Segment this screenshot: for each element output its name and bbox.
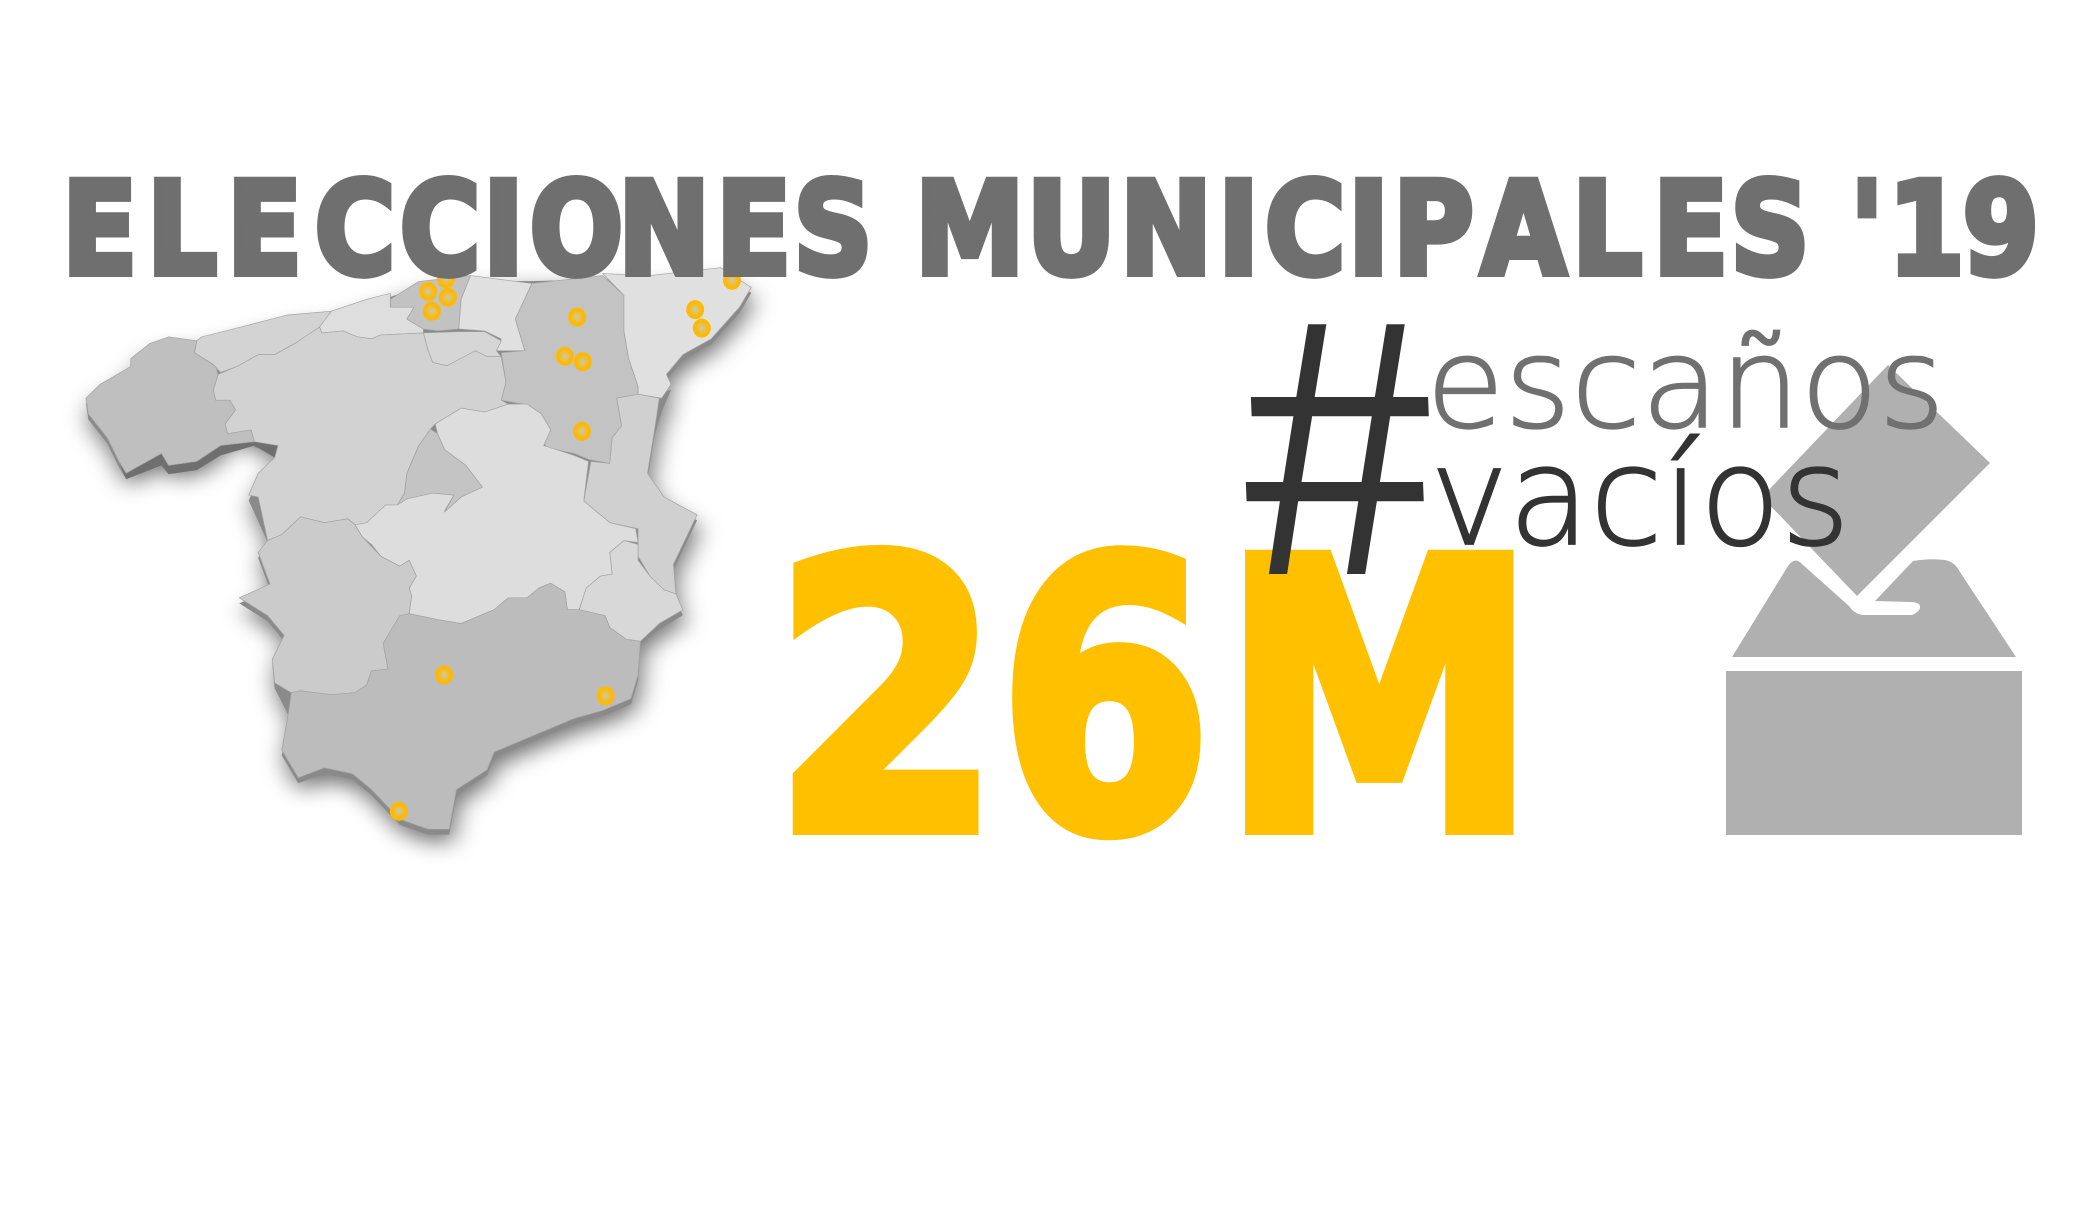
region: Extremadura [239,517,416,695]
map location dots [390,269,741,821]
region: Murcia [579,541,683,641]
map of Spain [86,268,754,843]
region: Madrid [397,429,482,512]
map regions [86,268,751,829]
headline 26M [773,483,1537,916]
region: Cataluna [603,268,751,398]
box body [1726,671,2022,835]
headline 26M: 6 [999,483,1211,916]
region: La Rioja [423,332,501,366]
region: Valencia [584,394,697,594]
region: Cantabria [320,293,423,339]
box lid [1732,559,2016,657]
ballot paper [1762,365,1990,596]
region: Pais Vasco [390,276,471,331]
headline 26M: 2 [773,483,1001,916]
hashtag word: escaños: escaños [1426,310,1945,457]
hashtag word: vacíos: vacíos [1430,418,1850,577]
Galicia coastal extrusion [88,414,278,479]
region: Castilla y Leon [213,327,508,541]
hash symbol: # [1235,245,1442,652]
region: Castilla-La Mancha [355,404,638,624]
region: Asturias [194,311,331,372]
region: Galicia [86,337,254,473]
region: Andalucia [282,583,640,829]
map shadow [89,281,754,843]
icon: ballot box [1726,365,2022,835]
region: Navarra [459,276,532,351]
region: Aragon [501,276,638,463]
title: ELECCIONES MUNICIPALES '19 [62,156,2039,304]
map extrusion [86,273,751,835]
headline 26M: M [1222,483,1537,916]
